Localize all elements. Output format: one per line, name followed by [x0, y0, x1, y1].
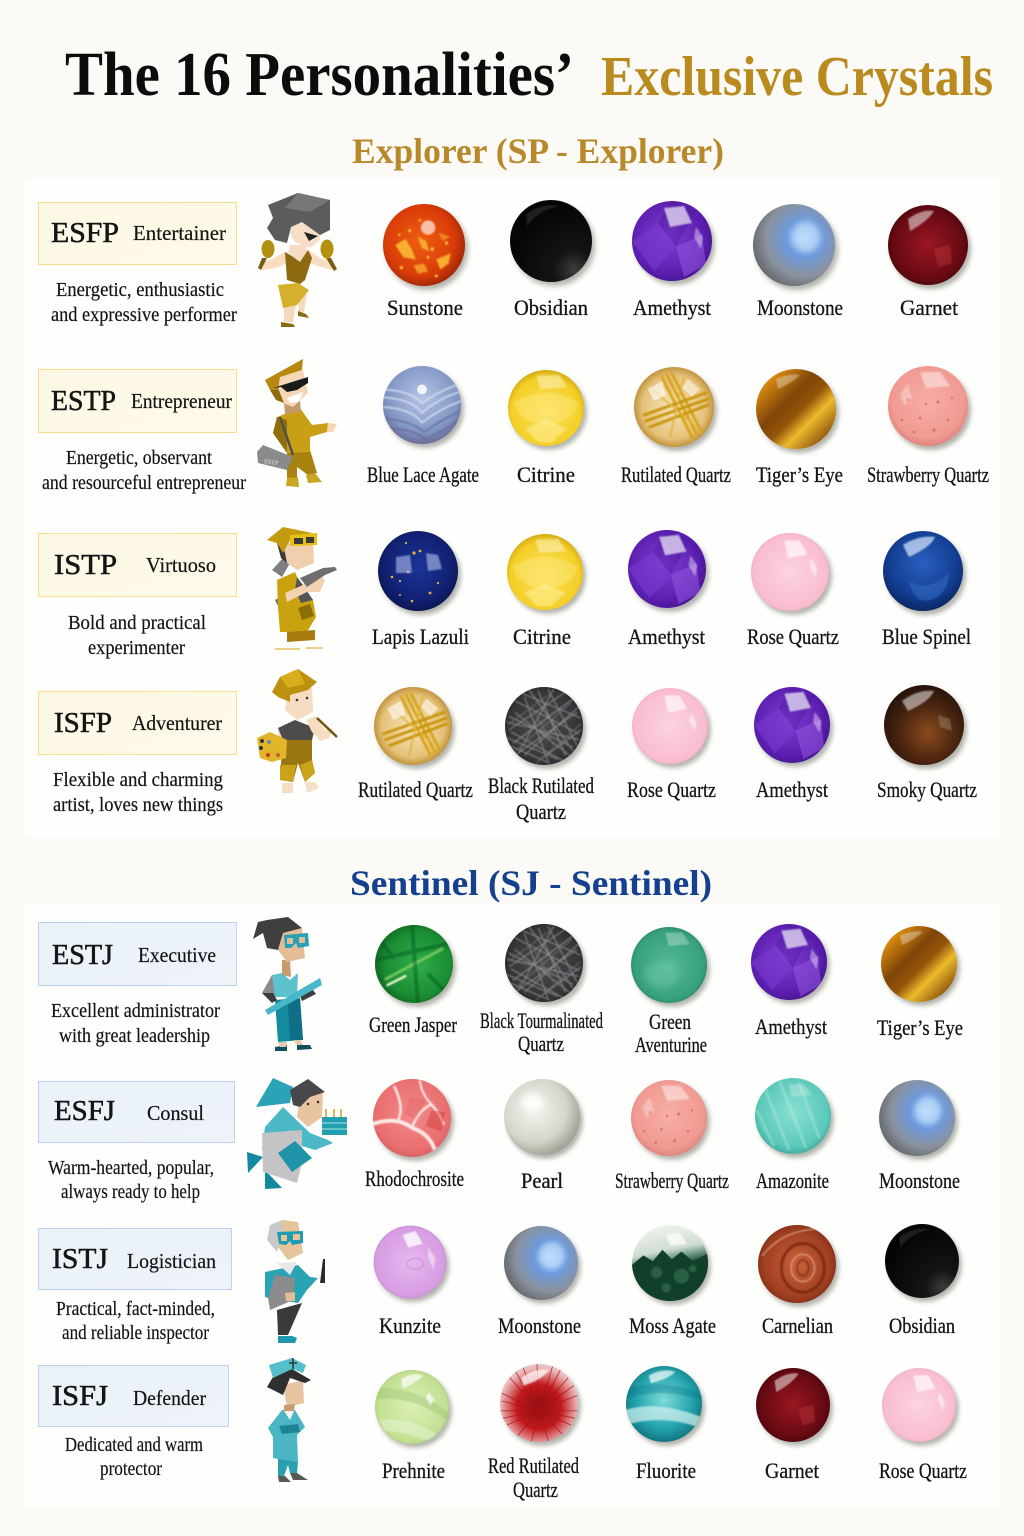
gem: Obsidian: [510, 200, 595, 286]
type card: ISFJ: ISFJ: [52, 1380, 108, 1412]
description: ISFJ: Dedicated and warm: [65, 1434, 203, 1456]
gem labels: ESFP: Sunstone: [387, 295, 463, 320]
description: ESFP: and expressive performer: [51, 304, 237, 326]
description: ESFJ: always ready to help: [61, 1181, 200, 1203]
description: ESFP: [51, 279, 237, 326]
character: ESFJ consul: [247, 1078, 347, 1189]
gem: Amethyst: [628, 530, 709, 612]
gem: Prehnite: [375, 1370, 452, 1448]
description: ESTP: and resourceful entrepreneur: [42, 472, 246, 494]
type card: ISFJ: [38, 1366, 228, 1426]
gem labels: ESFJ: Rhodochrosite: [365, 1166, 464, 1191]
gem labels: ISTP: Blue Spinel: [882, 624, 971, 649]
gem labels: ISFJ: Prehnite: [382, 1458, 445, 1483]
gem: Fluorite: [626, 1366, 705, 1446]
description: ISFP: Flexible and charming: [53, 769, 223, 791]
character: ISFJ defender: [267, 1358, 311, 1482]
character: ISFP adventurer: [257, 669, 337, 793]
gem labels: ESTP: Blue Lace Agate: [367, 462, 479, 487]
gem labels: ISFP: Rutilated Quartz: [358, 777, 473, 802]
gem labels: ESFJ: [365, 1166, 960, 1193]
gem: Rhodochrosite: [373, 1079, 454, 1161]
character: ESTJ executive: [253, 917, 322, 1051]
gem: Kunzite: [374, 1226, 449, 1302]
description: ESTP: [42, 447, 246, 494]
character: ESTP entrepreneur: [257, 359, 337, 487]
type card: ISTJ: [38, 1228, 232, 1290]
gem: Rutilated Quartz: [374, 687, 455, 769]
gem labels: ESTJ: Aventurine: [635, 1032, 707, 1057]
title: [65, 41, 993, 109]
gem: Rutilated Quartz: [634, 367, 717, 451]
gem: Blue Spinel: [883, 531, 966, 615]
type card: ESTP: Entrepreneur: [131, 389, 232, 413]
description: ESTP: Energetic, observant: [66, 447, 212, 469]
gem labels: ISFP: Quartz: [516, 799, 566, 824]
type card: ESFJ: Consul: [147, 1101, 204, 1125]
description: ISTP: Bold and practical: [68, 612, 206, 634]
gem: Rose Quartz: [882, 1368, 959, 1446]
gem: Obsidian: [885, 1224, 962, 1302]
gem: Carnelian: [758, 1225, 839, 1307]
gem labels: ISTP: Citrine: [513, 624, 571, 649]
gem: Moss Agate: [632, 1225, 711, 1305]
heading: Sentinel: Sentinel (SJ - Sentinel): [350, 863, 712, 903]
gem: Green Jasper: [375, 925, 456, 1007]
description: ISTP: experimenter: [88, 637, 185, 659]
gem labels: ISTP: Lapis Lazuli: [372, 624, 469, 649]
gem: Black Rutilated Quartz: [505, 687, 586, 769]
character: ISTP virtuoso: [267, 527, 337, 649]
character: ISTJ logistician: [265, 1220, 325, 1343]
gem labels: ESTJ: Tiger’s Eye: [877, 1015, 963, 1040]
gem labels: ESFP: [387, 295, 958, 320]
gem labels: ESTP: Citrine: [517, 462, 575, 487]
gem labels: ISFJ: Quartz: [513, 1477, 558, 1502]
gem: Garnet: [756, 1368, 833, 1446]
gem labels: ISTJ: Moss Agate: [629, 1313, 716, 1338]
gem labels: ESFJ: Amazonite: [756, 1168, 829, 1193]
gem labels: ESTJ: Green: [649, 1009, 691, 1034]
character: ESTP entrepreneur: ESTP: [264, 459, 279, 467]
gem labels: ESTJ: Green Jasper: [369, 1012, 458, 1037]
gem labels: ISFJ: Rose Quartz: [879, 1458, 967, 1483]
gem: Strawberry Quartz: [888, 366, 971, 450]
type card: ESFP: ESFP: [51, 217, 119, 249]
gem labels: ISFP: Smoky Quartz: [877, 777, 977, 802]
type card: ESTJ: [38, 922, 236, 986]
gem labels: ESFP: Amethyst: [633, 295, 711, 320]
gem labels: ESTJ: Black Tourmalinated: [480, 1008, 603, 1033]
gem: Amethyst: [754, 687, 833, 767]
description: ISTJ: [56, 1298, 215, 1344]
gem labels: ISFP: Rose Quartz: [627, 777, 716, 802]
gem: Pearl: [504, 1079, 583, 1159]
panel: Sentinel group: [25, 905, 1000, 1506]
gem labels: ISTJ: Kunzite: [379, 1313, 441, 1338]
description: ESTJ: Excellent administrator: [51, 1000, 220, 1022]
description: ISTJ: Practical, fact-minded,: [56, 1298, 215, 1320]
gem: Red Rutilated Quartz: [500, 1364, 581, 1446]
description: ISFP: [53, 769, 223, 816]
gem labels: ESFP: Obsidian: [514, 295, 588, 320]
gem: Black Tourmalinated Quartz: [505, 924, 586, 1006]
type card: ISFJ: Defender: [133, 1386, 206, 1410]
description: ISTP: [68, 612, 206, 659]
gem labels: ISFJ: Fluorite: [636, 1458, 696, 1483]
gem labels: ESTP: Tiger’s Eye: [756, 462, 843, 487]
gem labels: ESTP: [367, 462, 989, 487]
gem: Amethyst: [751, 924, 830, 1004]
gem labels: ISTJ: Obsidian: [889, 1313, 955, 1338]
title: The 16 Personalities’: [65, 41, 574, 109]
type card: ISTJ: Logistician: [127, 1249, 216, 1273]
type card: ESFP: [38, 202, 236, 264]
gem: Moonstone: [753, 204, 838, 290]
type card: ISTJ: ISTJ: [52, 1243, 108, 1275]
description: ISFJ: [65, 1434, 203, 1480]
gem labels: ISFP: Black Rutilated: [488, 773, 594, 798]
type card: ESTP: ESTP: [51, 385, 116, 417]
gem: Citrine: [507, 534, 586, 614]
gem labels: ISTP: Rose Quartz: [747, 624, 839, 649]
gem labels: ESTJ: Quartz: [518, 1031, 564, 1056]
gem labels: ISTJ: Carnelian: [762, 1313, 833, 1338]
gem labels: ISFP: [358, 773, 977, 824]
type card: ESFJ: [38, 1082, 234, 1142]
gem: Moonstone: [504, 1226, 581, 1304]
gem: Tiger's Eye: [881, 926, 960, 1006]
description: ISFP: artist, loves new things: [53, 794, 223, 816]
gem: Tiger's Eye: [756, 369, 839, 453]
gem labels: ESTP: Rutilated Quartz: [621, 462, 731, 487]
gem labels: ESFJ: Strawberry Quartz: [615, 1168, 729, 1193]
type card: ESTJ: Executive: [138, 943, 216, 967]
gem labels: ESFJ: Moonstone: [879, 1168, 960, 1193]
description: ISFJ: protector: [100, 1458, 162, 1480]
character: ESFP entertainer: [258, 193, 337, 327]
type card: ISTP: ISTP: [54, 549, 117, 581]
type card: ESTP: [38, 370, 236, 432]
gem labels: ESFP: Garnet: [900, 295, 958, 320]
type card: ISFP: Adventurer: [132, 711, 222, 735]
description: ESTJ: with great leadership: [59, 1025, 210, 1047]
type card: ESTJ: ESTJ: [52, 939, 113, 971]
gem labels: ISTJ: [379, 1313, 955, 1338]
gem labels: ESFJ: Pearl: [521, 1168, 563, 1193]
panel: Explorer group: [25, 178, 1000, 838]
gem: Garnet: [888, 205, 971, 289]
gem labels: ISFJ: Garnet: [765, 1458, 819, 1483]
gem labels: ISFP: Amethyst: [756, 777, 828, 802]
gem labels: ISFJ: Red Rutilated: [488, 1453, 579, 1478]
type card: ISFP: ISFP: [54, 707, 112, 739]
heading: Explorer: Explorer (SP - Explorer): [352, 131, 724, 171]
gem labels: ISTP: [372, 624, 971, 649]
type card: ESFP: Entertainer: [133, 221, 226, 245]
gem labels: ISTP: Amethyst: [628, 624, 705, 649]
description: ESFP: Energetic, enthusiastic: [56, 279, 224, 301]
gem: Sunstone: [383, 204, 468, 290]
gem: Amethyst: [632, 201, 715, 285]
gem: Rose Quartz: [751, 533, 832, 615]
gem: Green Aventurine: [631, 927, 710, 1007]
gem: Lapis Lazuli: [378, 531, 461, 615]
gem labels: ESFP: Moonstone: [757, 295, 843, 320]
gem: Amazonite: [755, 1078, 834, 1158]
gem labels: ISTJ: Moonstone: [498, 1313, 581, 1338]
gem: Strawberry Quartz: [631, 1080, 710, 1160]
gem: Rose Quartz: [632, 688, 711, 768]
gem labels: ISFJ: [382, 1453, 967, 1502]
type card: ISTP: [38, 534, 236, 596]
gem: Smoky Quartz: [884, 685, 967, 769]
gem: Moonstone: [879, 1080, 958, 1160]
type card: ISFP: [38, 692, 236, 754]
gem labels: ESTJ: [369, 1008, 963, 1057]
gem: Blue Lace Agate: [383, 366, 464, 448]
description: ESTJ: [51, 1000, 220, 1047]
type card: ISTP: Virtuoso: [146, 553, 216, 577]
type card: ESFJ: ESFJ: [54, 1095, 115, 1127]
description: ISTJ: and reliable inspector: [62, 1322, 209, 1344]
gem: Citrine: [508, 370, 587, 450]
description: ESFJ: Warm-hearted, popular,: [48, 1157, 214, 1179]
gem labels: ESTJ: Amethyst: [755, 1014, 827, 1039]
description: ESFJ: [48, 1157, 214, 1203]
